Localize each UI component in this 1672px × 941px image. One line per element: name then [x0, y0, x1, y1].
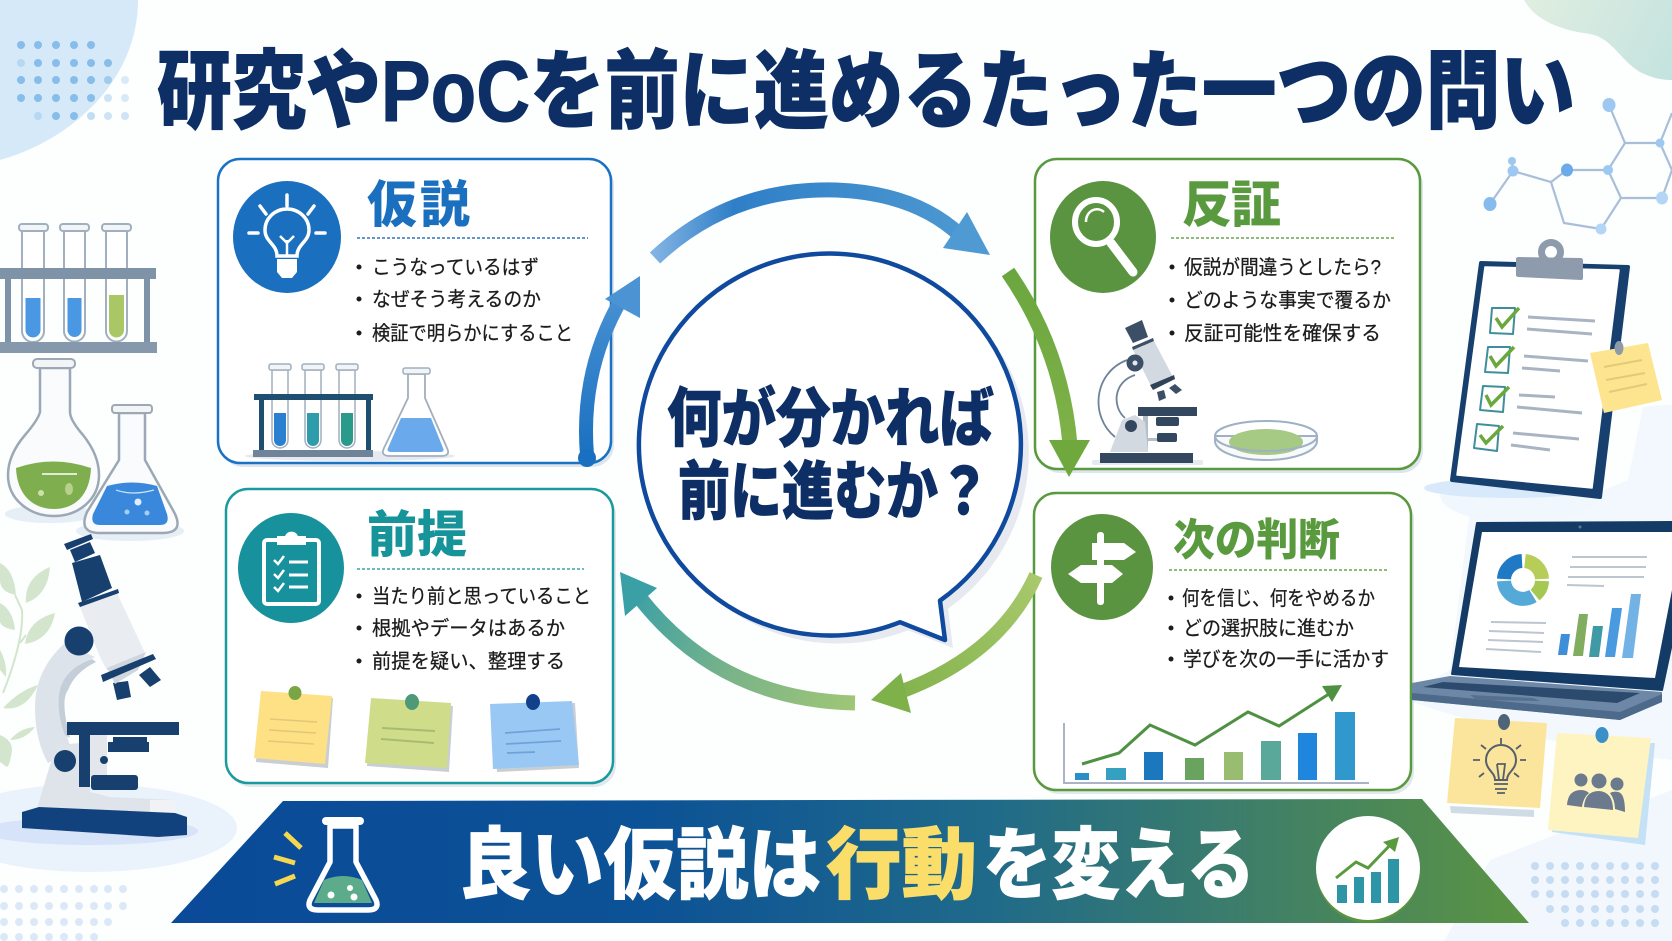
illustration: left flasks: [5, 359, 184, 541]
panel: 前提: [226, 489, 616, 787]
heading: 前提: [367, 507, 467, 563]
bullet list: 学びを次の一手に活かす: [1183, 648, 1389, 671]
central question: 何が分かれば: [667, 383, 994, 455]
arrow: top blue: [655, 190, 990, 258]
arrow: left blue: [578, 276, 640, 467]
central question: [667, 383, 994, 528]
sticky note: blue: [490, 694, 579, 772]
test tube: blue: [60, 224, 89, 342]
test tube: green: [102, 224, 131, 342]
heading: 次の判断: [1173, 516, 1340, 565]
heading: 反証: [1182, 177, 1281, 233]
bullet list: 当たり前と思っていること: [372, 585, 591, 608]
bullet list: 検証で明らかにすること: [372, 322, 573, 345]
sticky note: green: [365, 694, 453, 772]
flask: green: [8, 359, 99, 516]
bullet list: 根拠やデータはあるか: [372, 617, 565, 640]
icon: signpost: [1051, 514, 1153, 620]
slogan: 行動: [826, 821, 977, 909]
illustration: laptop: [1412, 522, 1672, 720]
bar and line chart: [1064, 685, 1369, 783]
bullet list: 前提を疑い、整理する: [372, 650, 565, 673]
icon: light bulb: [233, 181, 341, 293]
bullet list: [356, 585, 591, 673]
icon: clipboard: [238, 513, 344, 623]
icon: sparks: [274, 833, 301, 884]
sticky note: light bulb: [1447, 714, 1547, 817]
icon: growth chart: [1316, 816, 1420, 923]
speech bubble: [639, 254, 1029, 648]
panel: 次の判断: [1034, 493, 1414, 794]
bullet list: どの選択肢に進むか: [1183, 617, 1354, 640]
banner: [171, 799, 1529, 923]
blob: right side background: [1412, 405, 1672, 760]
bullet list: 反証可能性を確保する: [1184, 322, 1381, 345]
bullet list: 仮説が間違うとしたら?: [1184, 256, 1381, 279]
slogan: [459, 821, 1255, 909]
illustration: molecule: [1484, 98, 1672, 234]
illustration: left microscope: [0, 534, 237, 872]
arrow: right green: [1008, 272, 1090, 477]
illustration: clipboard: [1424, 242, 1662, 523]
sticky note: people: [1548, 727, 1655, 845]
bullet list: こうなっているはず: [372, 256, 539, 279]
sticky note: yellow: [254, 686, 333, 768]
blob: top left: [0, 0, 138, 160]
arrow: lower right green: [871, 575, 1036, 713]
panel: 仮説: [218, 159, 614, 467]
bullet list: 何を信じ、何をやめるか: [1182, 587, 1375, 610]
blob: bottom right background: [1444, 790, 1672, 941]
illustration: left test tube rack: [0, 224, 157, 353]
bullet list: どのような事実で覆るか: [1184, 289, 1391, 312]
illustration: test tubes and flask: [245, 364, 455, 461]
panel: 反証: [1035, 159, 1423, 473]
heading: 仮説: [367, 177, 470, 233]
arrow: bottom teal: [620, 572, 855, 703]
dots: bottom left: [0, 885, 127, 941]
donut chart: [1504, 561, 1542, 599]
illustration: petri dish: [1215, 421, 1317, 460]
slogan: を変える: [983, 821, 1255, 909]
icon: magnifying glass: [1050, 181, 1156, 293]
flask: blue: [84, 405, 178, 533]
bullet list: [1170, 256, 1391, 345]
bullet list: なぜそう考えるのか: [372, 288, 541, 311]
sticky note: [1590, 341, 1662, 413]
icon: flask: [309, 821, 377, 910]
illustration: leaves: [0, 563, 55, 767]
illustration: microscope: [1092, 320, 1203, 465]
central question: 前に進むか？: [678, 456, 990, 528]
dots: bottom right: [1531, 862, 1659, 927]
bullet list: [356, 256, 573, 345]
dots: top left: [17, 41, 129, 120]
slogan: 良い仮説は: [459, 821, 821, 909]
blob: top right: [1524, 0, 1672, 80]
bar chart: [1558, 594, 1641, 658]
bullet list: [1168, 587, 1389, 671]
test tube: blue: [19, 224, 48, 342]
